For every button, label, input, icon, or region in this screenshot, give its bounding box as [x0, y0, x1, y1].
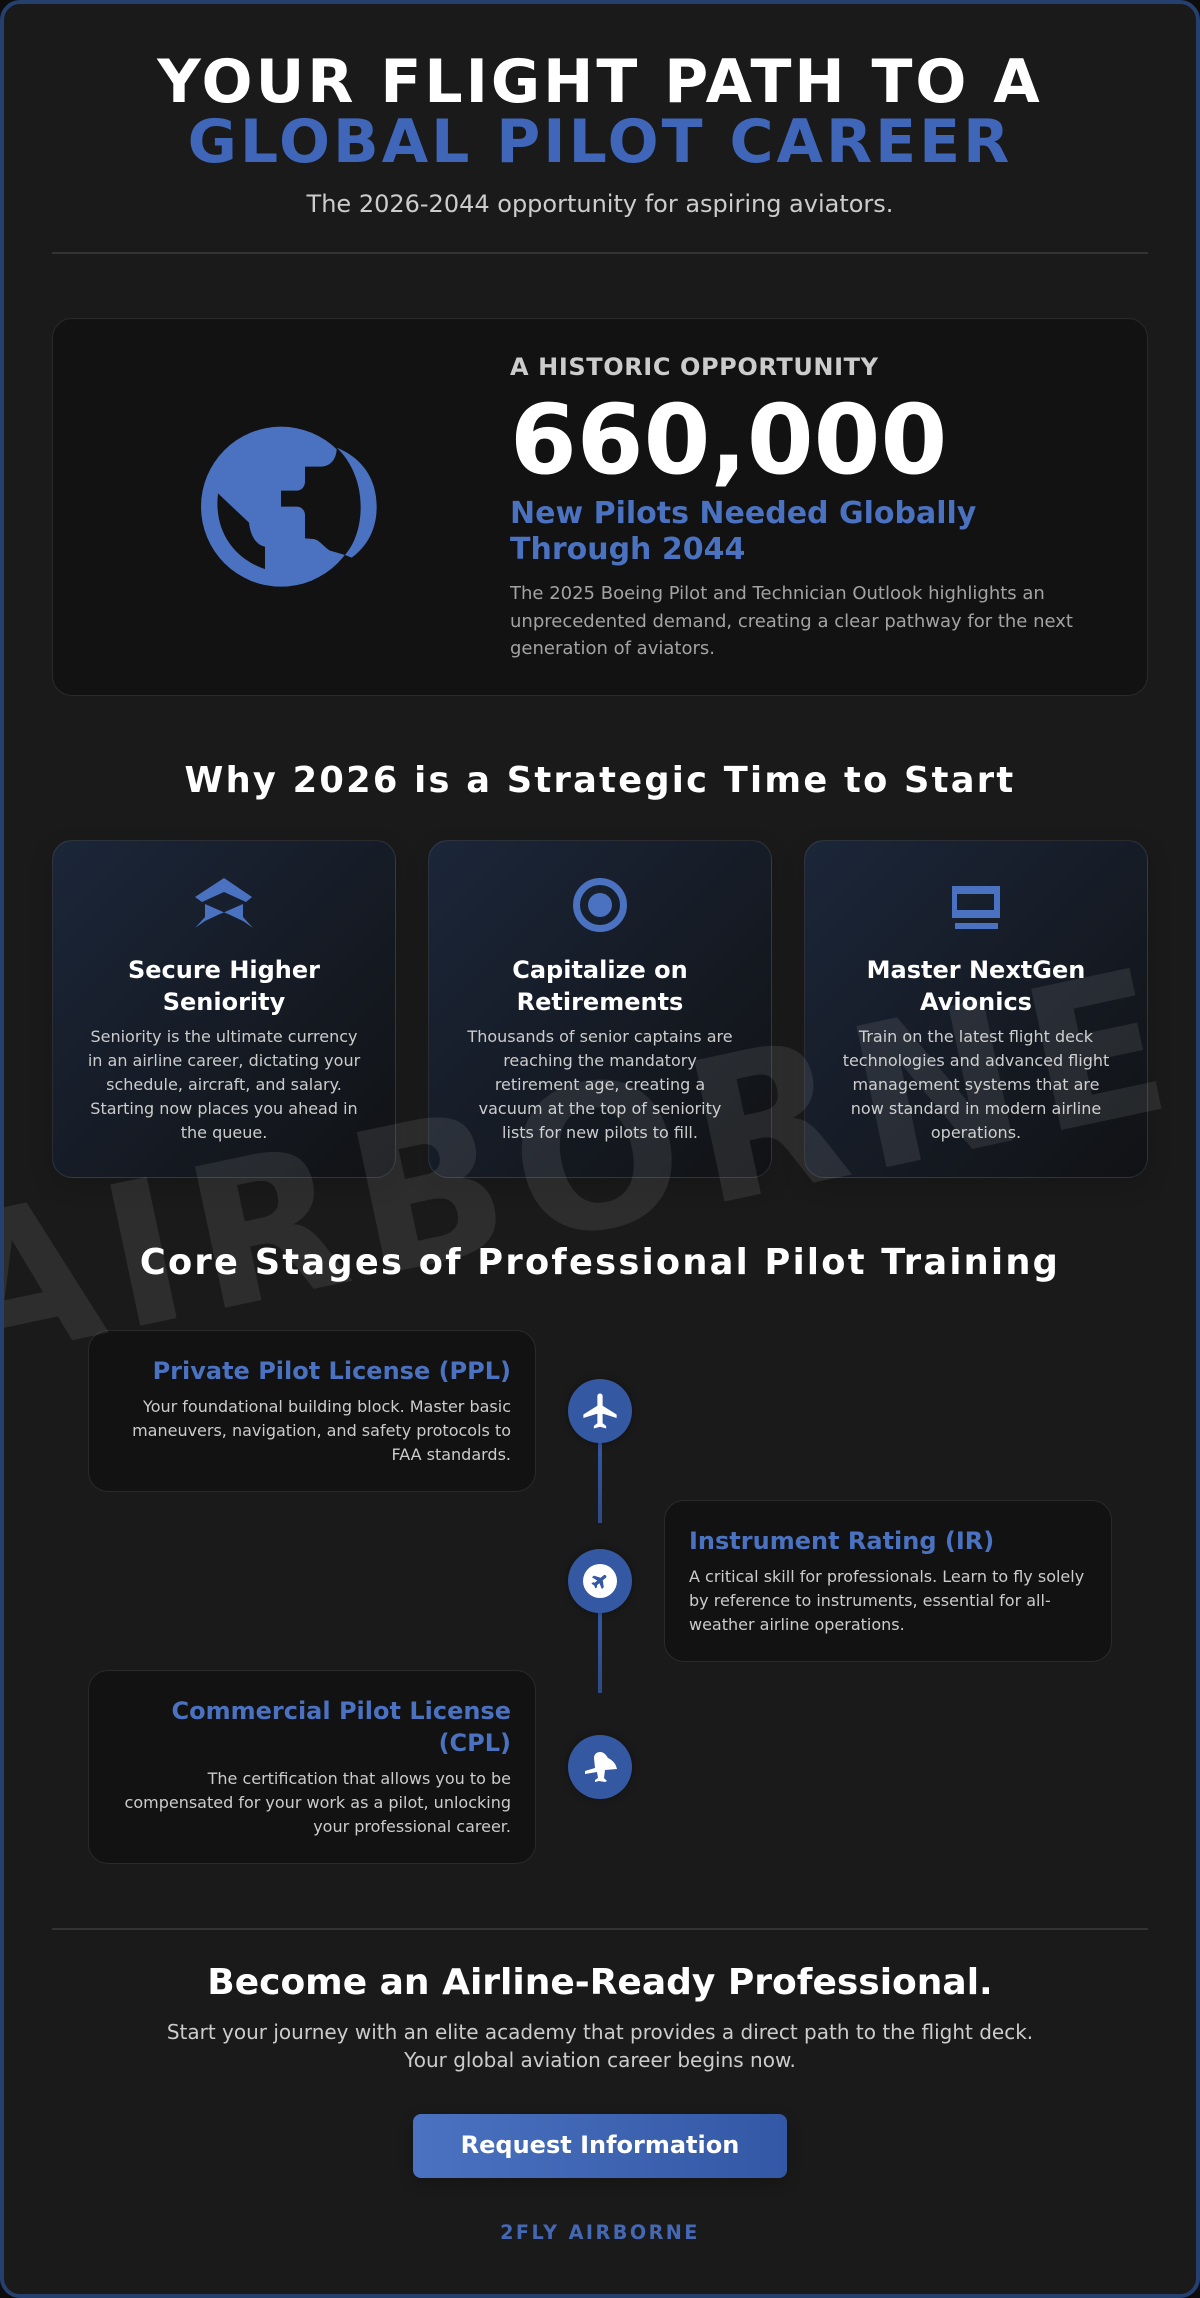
icon: target: [573, 878, 627, 932]
heading: core stages: Core Stages of Professional Pilot Training: [140, 1242, 1060, 1283]
stage text: your professional career.: [313, 1817, 511, 1836]
stat: 660,000: 660,000: [510, 384, 947, 496]
card: seniority: [52, 840, 396, 1178]
stage title: Commercial Pilot License: [172, 1697, 511, 1725]
card text: [467, 1027, 733, 1142]
icon: plane node 1: [568, 1379, 632, 1443]
card title: Retirements: [517, 988, 683, 1016]
card title: [128, 956, 320, 1016]
stage: PPL: [88, 1330, 536, 1492]
stat label: Through 2044: [510, 532, 745, 567]
title: [156, 47, 1043, 177]
stage text: A critical skill for professionals. Learn to fly solely: [689, 1567, 1084, 1586]
subtitle: The 2026-2044 opportunity for aspiring aviators.: [307, 190, 893, 218]
stage text: weather airline operations.: [689, 1615, 905, 1634]
card text: [843, 1027, 1109, 1142]
card title: Seniority: [163, 988, 285, 1016]
stage: IR: [664, 1500, 1112, 1662]
cta heading: Become an Airline-Ready Professional.: [207, 1962, 993, 2003]
card text: Train on the latest flight deck: [859, 1027, 1093, 1046]
icon: plane node 3: [568, 1735, 632, 1799]
stat label: New Pilots Needed Globally: [510, 496, 976, 531]
card text: retirement age, creating a: [495, 1075, 705, 1094]
connector: IR to CPL: [598, 1612, 602, 1693]
card title: Avionics: [920, 988, 1032, 1016]
card title: Master NextGen: [867, 956, 1085, 984]
stage text: maneuvers, navigation, and safety protocols to: [132, 1421, 511, 1440]
stat label: [510, 496, 976, 567]
stage text: by reference to instruments, essential for all-: [689, 1591, 1051, 1610]
card text: technologies and advanced flight: [843, 1051, 1109, 1070]
stage text: [689, 1567, 1084, 1634]
heading: why 2026: Why 2026 is a Strategic Time to Start: [185, 760, 1015, 801]
card text: vacuum at the top of seniority: [479, 1099, 721, 1118]
card text: schedule, aircraft, and salary.: [106, 1075, 342, 1094]
icon: globe: [201, 426, 377, 587]
description: unprecedented demand, creating a clear pathway for the next: [510, 611, 1073, 632]
card title: Capitalize on: [512, 956, 688, 984]
footer brand: 2FLY AIRBORNE: [500, 2221, 700, 2244]
description: generation of aviators.: [510, 638, 715, 659]
card: retirements: [428, 840, 772, 1178]
stage text: Your foundational building block. Master basic: [143, 1397, 511, 1416]
card title: Secure Higher: [128, 956, 320, 984]
card title: [512, 956, 688, 1016]
card text: in an airline career, dictating your: [88, 1051, 360, 1070]
card: avionics: [804, 840, 1148, 1178]
stage text: [125, 1769, 511, 1836]
stage title: Instrument Rating (IR): [689, 1527, 994, 1555]
card text: management systems that are: [852, 1075, 1099, 1094]
icon: graduation cap: [195, 878, 253, 928]
stage title: Private Pilot License (PPL): [153, 1357, 511, 1385]
stage text: The certification that allows you to be: [208, 1769, 511, 1788]
card text: [88, 1027, 360, 1142]
title: YOUR FLIGHT PATH TO A: [157, 47, 1043, 117]
cta text: Start your journey with an elite academy that provides a direct path to the flight deck.: [167, 2020, 1033, 2044]
title: GLOBAL PILOT CAREER: [188, 107, 1012, 177]
card text: Starting now places you ahead in: [90, 1099, 358, 1118]
description: [510, 583, 1073, 659]
stage text: [132, 1397, 511, 1464]
description: The 2025 Boeing Pilot and Technician Outlook highlights an: [510, 583, 1045, 604]
eyebrow: a historic opportunity: A HISTORIC OPPORTUNITY: [510, 353, 879, 381]
icon: plane node 2: [568, 1549, 632, 1613]
stage text: FAA standards.: [391, 1445, 511, 1464]
card text: reaching the mandatory: [503, 1051, 697, 1070]
card text: operations.: [931, 1123, 1021, 1142]
card title: [867, 956, 1085, 1016]
card text: the queue.: [181, 1123, 267, 1142]
card text: now standard in modern airline: [851, 1099, 1101, 1118]
stage: CPL: [88, 1670, 536, 1864]
card text: Seniority is the ultimate currency: [90, 1027, 358, 1046]
button: request information: Request Information: [461, 2131, 739, 2159]
connector: PPL to IR: [598, 1442, 602, 1523]
cta text: [167, 2020, 1033, 2072]
cta text: Your global aviation career begins now.: [404, 2048, 796, 2072]
card text: Thousands of senior captains are: [467, 1027, 733, 1046]
panel: historic opportunity: [52, 318, 1148, 696]
icon: monitor: [952, 886, 1000, 929]
card text: lists for new pilots to fill.: [502, 1123, 698, 1142]
stage title: [172, 1697, 511, 1757]
stage text: compensated for your work as a pilot, unlocking: [125, 1793, 511, 1812]
stage title: (CPL): [439, 1729, 511, 1757]
button: request information: [413, 2114, 787, 2178]
